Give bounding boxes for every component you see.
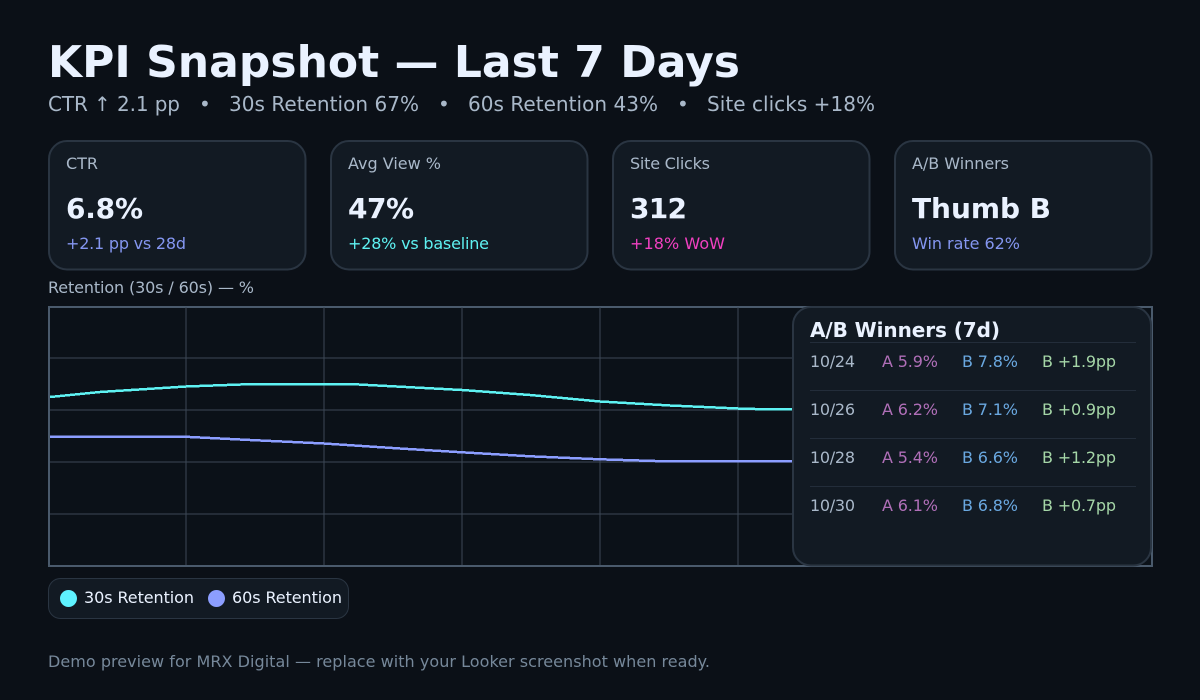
panel: CTR card: 6.8% <box>66 192 143 225</box>
panel: Avg View % card: +28% vs baseline <box>348 234 489 253</box>
panel: CTR card: CTR <box>66 154 98 173</box>
footer note: Demo preview for MRX Digital — replace with your Looker screenshot when ready. <box>48 652 710 671</box>
title: KPI Snapshot — Last 7 Days <box>48 37 740 88</box>
legend item: 30s retention: 30s Retention <box>84 588 194 607</box>
panel: CTR card: +2.1 pp vs 28d <box>66 234 186 253</box>
row 10/30: B 6.8% <box>962 496 1018 515</box>
panel: A/B Winners card: Thumb B <box>912 192 1051 225</box>
panel: CTR card <box>49 141 306 270</box>
row 10/26: A 6.2% <box>882 400 938 419</box>
row 10/28: B +1.2pp <box>1042 448 1116 467</box>
row 10/28: A 5.4% <box>882 448 938 467</box>
subtitle: headline metrics: • <box>438 92 450 116</box>
row 10/24: 10/24 <box>810 352 855 371</box>
subtitle: headline metrics <box>48 92 875 116</box>
row 10/24: A 5.9% <box>882 352 938 371</box>
row 10/26: 10/26 <box>810 400 855 419</box>
row 10/28: 10/28 <box>810 448 855 467</box>
panel: A/B Winners table <box>793 307 1151 566</box>
row 10/24 <box>810 352 1116 371</box>
panel: Site Clicks card: Site Clicks <box>630 154 710 173</box>
series: 60s retention <box>50 436 795 461</box>
chart heading: Retention (30s / 60s) — % <box>48 278 254 297</box>
panel: Site Clicks card <box>613 141 870 270</box>
subtitle: headline metrics: CTR ↑ 2.1 pp <box>48 92 180 116</box>
row 10/30: B +0.7pp <box>1042 496 1116 515</box>
legend item: 60s retention: 60s Retention <box>232 588 342 607</box>
panel: Avg View % card: 47% <box>348 192 414 225</box>
row 10/24: B 7.8% <box>962 352 1018 371</box>
row 10/30 <box>810 496 1116 515</box>
subtitle: headline metrics: Site clicks +18% <box>707 92 875 116</box>
row 10/30: A 6.1% <box>882 496 938 515</box>
subtitle: headline metrics: • <box>677 92 689 116</box>
row 10/28 <box>810 448 1116 467</box>
subtitle: headline metrics: • <box>199 92 211 116</box>
panel: A/B Winners card <box>895 141 1152 270</box>
table heading: A/B Winners (7d) <box>810 318 1000 342</box>
legend <box>48 578 348 618</box>
row 10/24: B +1.9pp <box>1042 352 1116 371</box>
panel: Site Clicks card: +18% WoW <box>630 234 725 253</box>
subtitle: headline metrics: 60s Retention 43% <box>468 92 658 116</box>
panel: Site Clicks card: 312 <box>630 192 687 225</box>
row 10/30: 10/30 <box>810 496 855 515</box>
series: 30s retention <box>50 384 795 409</box>
row 10/26: B 7.1% <box>962 400 1018 419</box>
subtitle: headline metrics: 30s Retention 67% <box>229 92 419 116</box>
panel: A/B Winners card: Win rate 62% <box>912 234 1020 253</box>
row 10/28: B 6.6% <box>962 448 1018 467</box>
panel: A/B Winners card: A/B Winners <box>912 154 1009 173</box>
panel: Avg View % card: Avg View % <box>348 154 441 173</box>
line chart: retention <box>49 307 1152 566</box>
row 10/26 <box>810 400 1116 419</box>
panel: Avg View % card <box>331 141 588 270</box>
row 10/26: B +0.9pp <box>1042 400 1116 419</box>
